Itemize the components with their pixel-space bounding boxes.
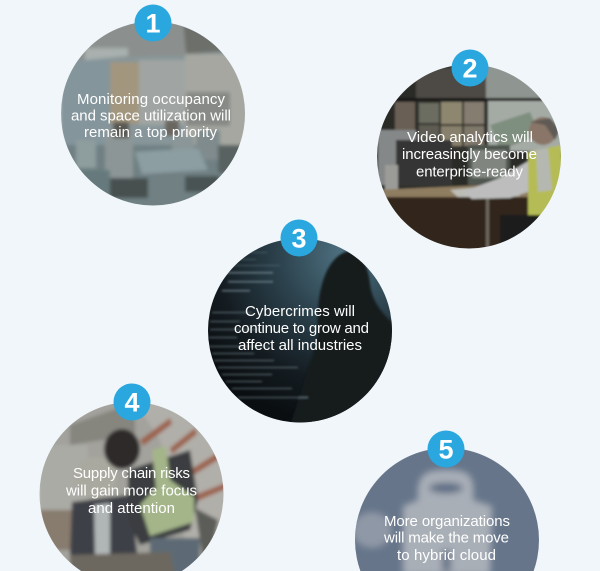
- caption: to hybrid cloud: [397, 547, 496, 564]
- caption: remain a top priority: [84, 124, 218, 141]
- panel: trend 5 hybrid cloud: [350, 430, 545, 571]
- caption: Video analytics will: [407, 129, 533, 146]
- caption: [71, 91, 231, 141]
- panel: trend 4 supply chain: [38, 384, 228, 571]
- badge 3: 3: [291, 224, 307, 254]
- caption: Monitoring occupancy: [77, 91, 226, 108]
- panel: trend 3 cybercrimes: [205, 220, 395, 425]
- photo: padlock-shaped cloud in sky: [350, 445, 545, 571]
- photo: hooded hacker with code: [205, 235, 395, 425]
- badge 1: 1: [145, 8, 161, 38]
- caption: will make the move: [383, 530, 509, 546]
- badge 4: [114, 384, 150, 420]
- caption: Cybercrimes will: [245, 303, 355, 320]
- badge 3: [280, 220, 318, 256]
- caption: and attention: [88, 500, 175, 517]
- badge 1: [134, 4, 172, 42]
- caption: [65, 465, 197, 517]
- caption: [402, 129, 537, 180]
- photo: warehouse workers: [38, 400, 228, 571]
- caption: continue to grow and: [234, 320, 369, 337]
- photo: office meeting room: [60, 20, 250, 210]
- caption: [234, 303, 369, 354]
- caption: and space utilization will: [71, 108, 231, 124]
- panel: trend 2 video analytics: [375, 50, 570, 253]
- caption: enterprise-ready: [416, 164, 524, 180]
- caption: More organizations: [384, 513, 510, 530]
- badge 5: [428, 430, 464, 468]
- photo: control room: [375, 62, 570, 253]
- badge 2: [452, 50, 488, 86]
- caption: increasingly become: [402, 146, 537, 163]
- caption: will gain more focus: [65, 482, 197, 500]
- caption: Supply chain risks: [73, 465, 190, 482]
- badge 4: 4: [124, 388, 140, 418]
- caption: [383, 513, 510, 564]
- badge 5: 5: [438, 434, 454, 464]
- badge 2: 2: [462, 54, 478, 84]
- panel: trend 1 occupancy monitoring: [60, 4, 250, 210]
- caption: affect all industries: [238, 337, 362, 354]
